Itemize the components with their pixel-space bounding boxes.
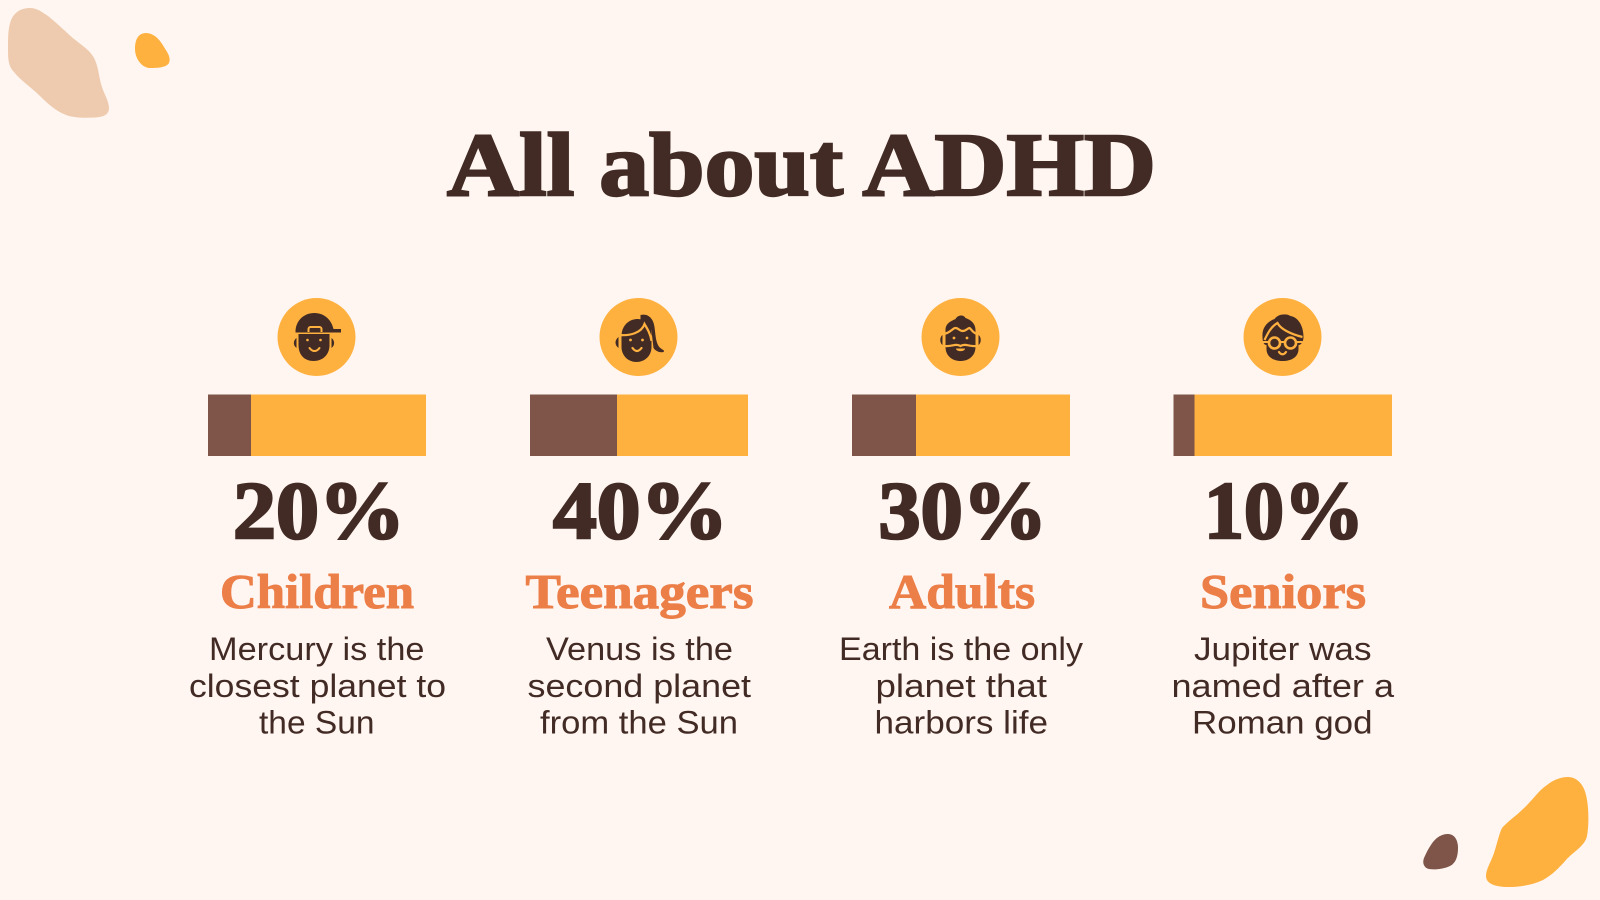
- icon: girl with ponytail: [600, 298, 678, 376]
- description: children: [189, 631, 446, 740]
- description: seniors: Jupiter was: [1194, 631, 1372, 667]
- percentage: 10%: 10%: [1204, 465, 1364, 556]
- progress bar: 40%: [530, 394, 748, 456]
- description: teenagers: from the Sun: [540, 704, 738, 740]
- description: children: closest planet to: [189, 668, 446, 704]
- decorative blob: bottom-right brown: [1423, 834, 1458, 869]
- progress bar: 30%: [852, 394, 1070, 456]
- description: children: the Sun: [259, 704, 374, 740]
- description: adults: [839, 631, 1083, 740]
- icon: bearded man: [922, 298, 1000, 376]
- column: teenagers: [526, 298, 754, 740]
- progress bar: 20%: [208, 394, 426, 456]
- description: teenagers: Venus is the: [546, 631, 733, 667]
- column: children: [189, 298, 446, 740]
- description: adults: harbors life: [874, 704, 1048, 740]
- column: seniors: [1172, 298, 1394, 740]
- description: teenagers: second planet: [528, 668, 751, 704]
- decorative blob: top-left orange: [135, 33, 170, 68]
- title: All about ADHD: [447, 116, 1156, 215]
- percentage: 30%: 30%: [878, 465, 1047, 556]
- description: seniors: named after a: [1172, 668, 1394, 704]
- percentage: 20%: 20%: [233, 465, 405, 556]
- icon: boy with cap: [278, 298, 356, 376]
- decorative blob: top-left peach: [8, 8, 109, 118]
- heading: children: Children: [220, 564, 414, 619]
- heading: seniors: Seniors: [1200, 564, 1366, 619]
- icon: senior with glasses: [1244, 298, 1322, 376]
- description: adults: Earth is the only: [839, 631, 1083, 667]
- description: teenagers: [528, 631, 751, 740]
- description: seniors: Roman god: [1192, 704, 1372, 740]
- heading: adults: Adults: [889, 564, 1035, 619]
- decorative blob: bottom-right orange: [1486, 777, 1588, 887]
- column: adults: [839, 298, 1083, 740]
- progress bar: 10%: [1174, 394, 1392, 456]
- description: children: Mercury is the: [209, 631, 424, 667]
- description: seniors: [1172, 631, 1394, 740]
- percentage: 40%: 40%: [553, 465, 728, 556]
- heading: teenagers: Teenagers: [526, 564, 754, 619]
- description: adults: planet that: [876, 668, 1047, 704]
